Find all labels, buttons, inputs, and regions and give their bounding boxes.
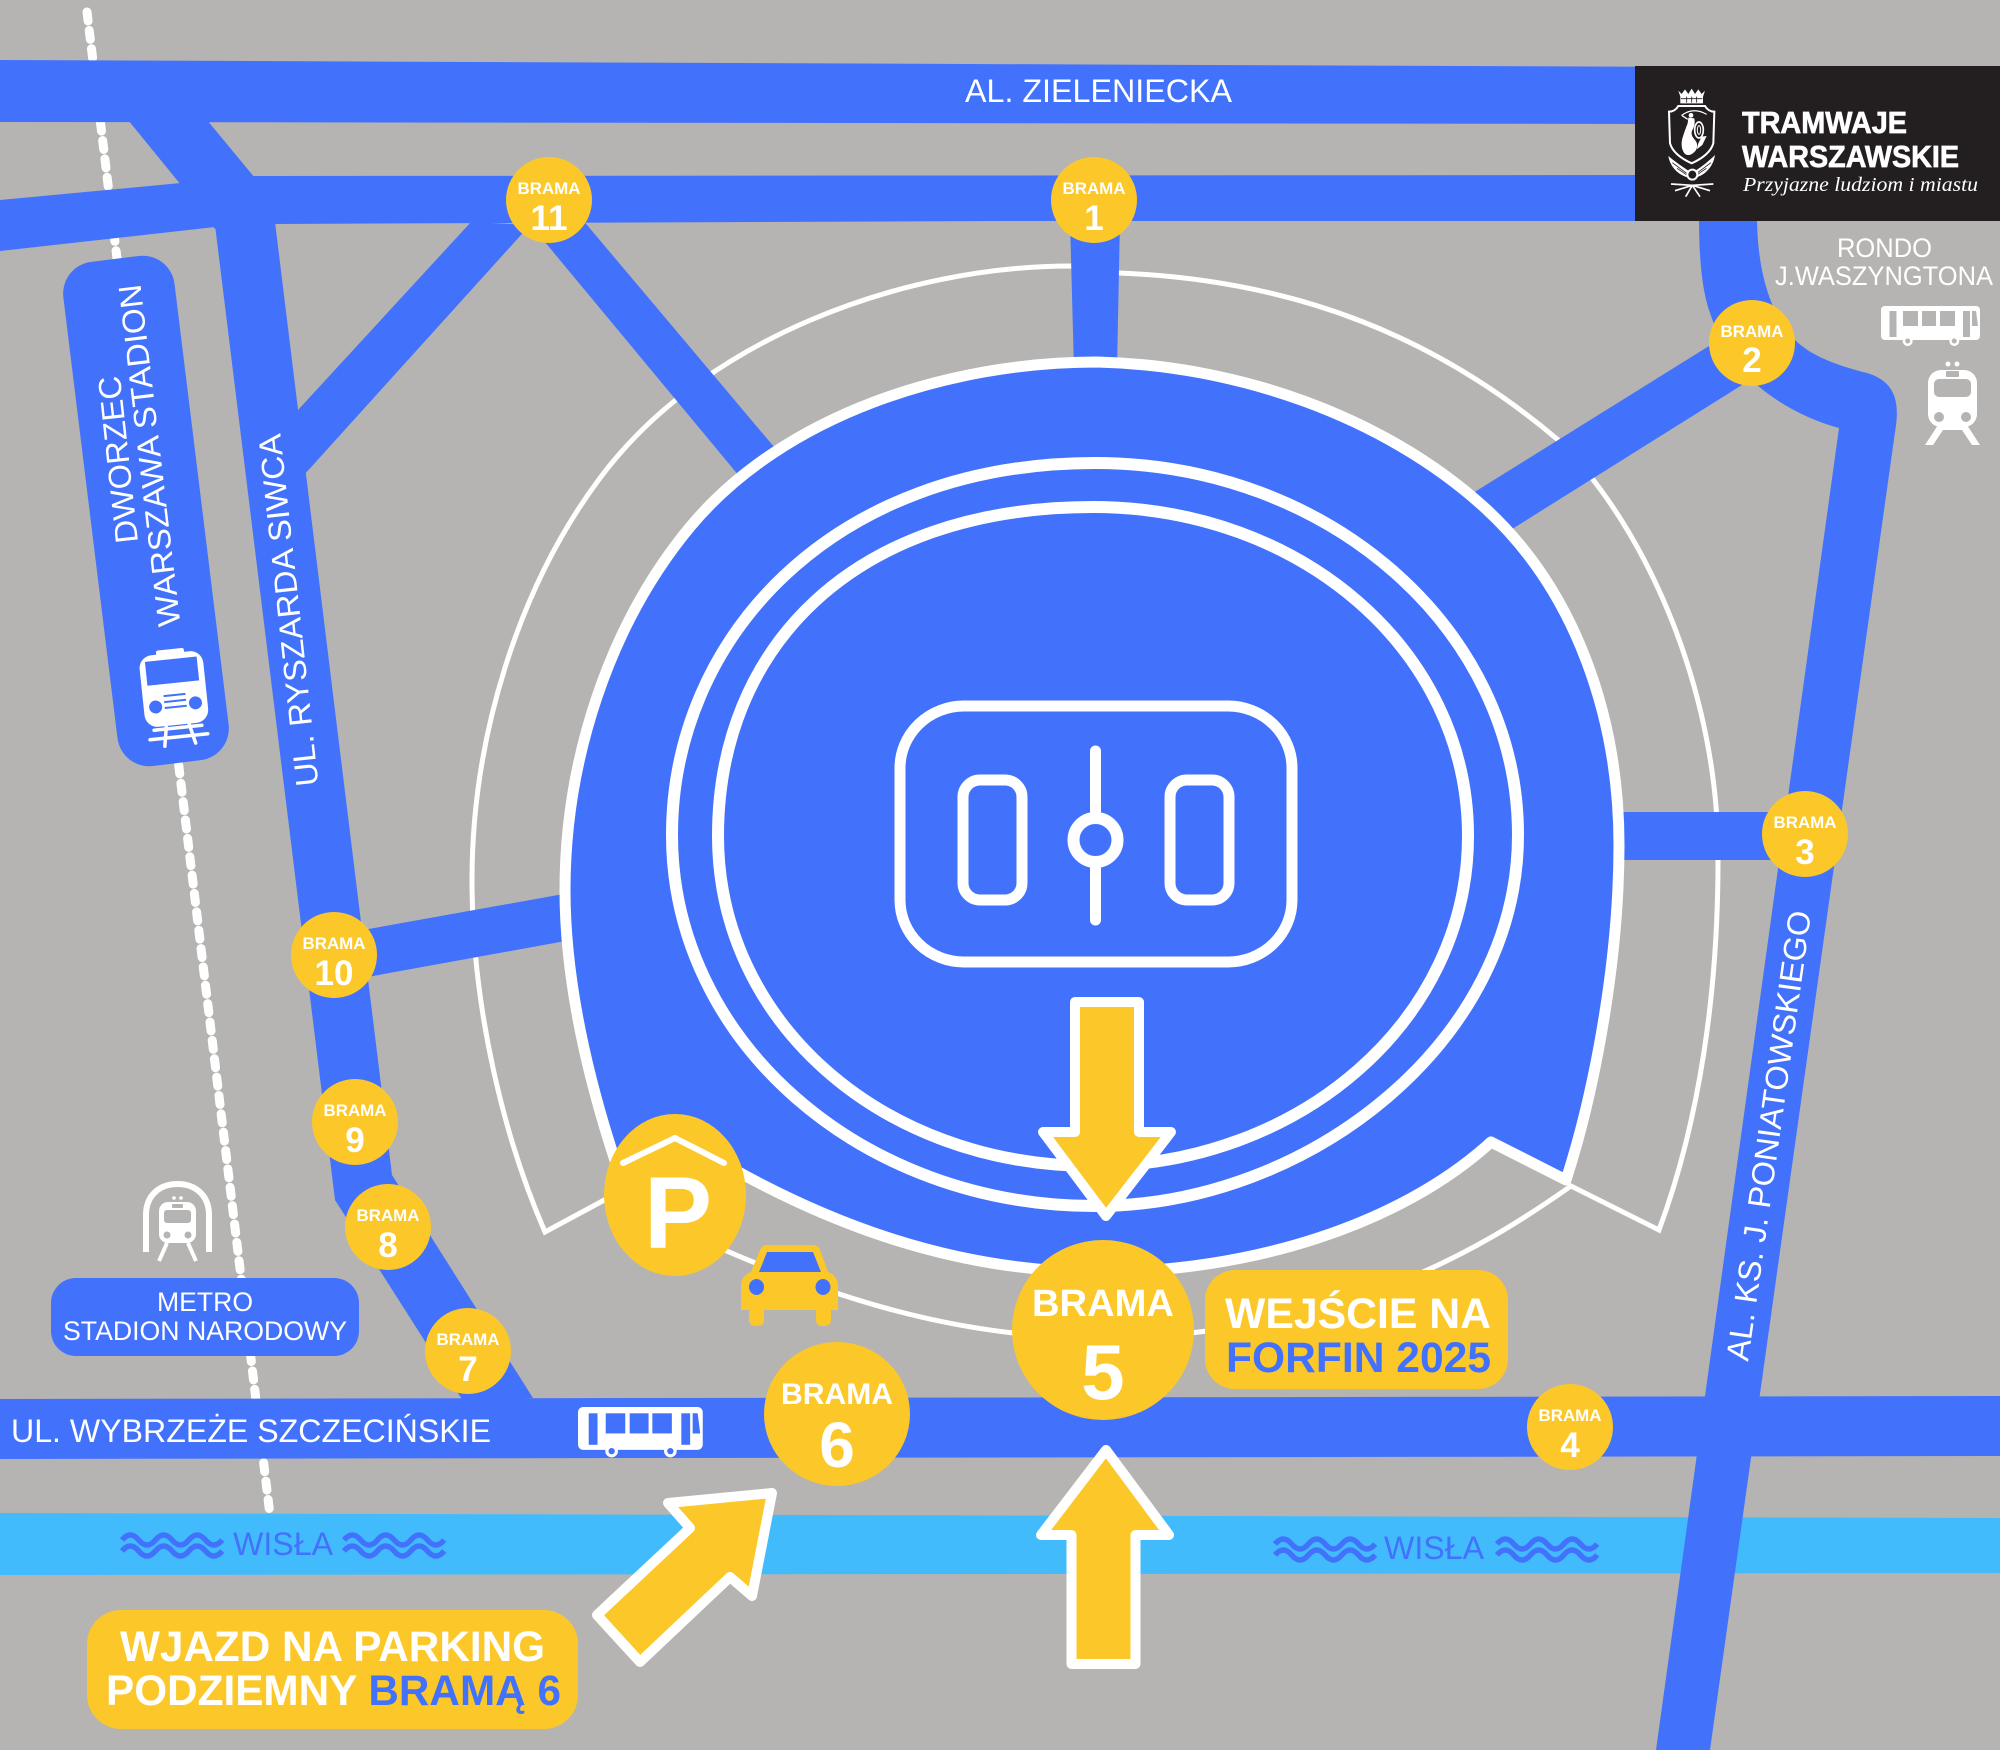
- gate 5: 5: [1081, 1328, 1125, 1416]
- road: link Siwca to gate 11: [298, 222, 530, 475]
- station name line 1: DWORZEC: [91, 374, 145, 545]
- gate 9: [312, 1079, 398, 1165]
- road: parallel street to gate 11 and 1: [0, 175, 1700, 251]
- callout: entrance to Forfin 2025: WEJŚCIE NA: [1225, 1289, 1491, 1338]
- gate 4: BRAMA: [1538, 1406, 1602, 1425]
- logo: Tramwaje Warszawskie: WARSZAWSKIE: [1742, 139, 1959, 174]
- gate 6: BRAMA: [781, 1378, 893, 1411]
- parking roof chevron: [623, 1138, 724, 1163]
- parking badge: [604, 1114, 746, 1276]
- gate 2: [1709, 300, 1795, 386]
- label: Rondo J. Waszyngtona: RONDO: [1837, 233, 1932, 263]
- callout: underground parking entrance: WJAZD NA PARKING: [120, 1623, 545, 1671]
- street label: Al. Zieleniecka: AL. ZIELENIECKA: [965, 73, 1233, 109]
- river label right: [1275, 1530, 1597, 1566]
- arrow: down to gate 5: [1043, 1002, 1171, 1216]
- logo wordmark: TRAMWAJE: [1742, 105, 1907, 140]
- stadium outer perimeter line: [472, 266, 1718, 1338]
- icon: waves right of label: [344, 1535, 444, 1556]
- icon: bus at Rondo: [1881, 306, 1980, 346]
- road: diagonal link: [128, 120, 255, 229]
- panel: metro Stadion Narodowy: STADION NARODOWY: [63, 1316, 347, 1346]
- callout: entrance to Forfin 2025: [1205, 1270, 1508, 1389]
- gate 3: BRAMA: [1774, 813, 1836, 832]
- crest shield: [1669, 106, 1714, 163]
- icon: waves left of label: [122, 1535, 222, 1556]
- road: gate 11 to stadium: [510, 200, 796, 500]
- gate 9: BRAMA: [324, 1101, 386, 1120]
- gate 3: 3: [1795, 833, 1815, 872]
- gate 1: 1: [1084, 199, 1104, 238]
- gate 8: 8: [378, 1226, 398, 1265]
- river label right: WISŁA: [1384, 1530, 1485, 1566]
- gate 7: 7: [458, 1350, 478, 1389]
- panel: metro Stadion Narodowy: METRO: [157, 1287, 253, 1317]
- road: gate 10 to stadium: [335, 892, 580, 982]
- gate 6: [764, 1342, 910, 1486]
- road: ul. Ryszarda Siwca: [215, 222, 533, 1401]
- road: gate 2 to stadium: [1473, 346, 1742, 531]
- callout: underground parking entrance: [87, 1610, 578, 1729]
- road: gate 1 to stadium: [1070, 220, 1120, 370]
- label: Rondo J. Waszyngtona: [1775, 233, 1993, 291]
- gate 2: 2: [1742, 341, 1762, 380]
- logo tagline: Przyjazne ludziom i miastu: [1742, 174, 1978, 196]
- river label left: [122, 1526, 444, 1562]
- gate 7: [425, 1308, 511, 1394]
- gate 4: 4: [1560, 1426, 1580, 1465]
- arrow: up to gate 5: [1041, 1450, 1169, 1664]
- gate 8: BRAMA: [356, 1206, 420, 1225]
- street label: ul. Wybrzeże Szczecińskie: UL. WYBRZEŻE SZCZECIŃSKIE: [11, 1413, 491, 1449]
- parking letter: P: [644, 1156, 712, 1270]
- station name line 2: WARSZAWA STADION: [112, 283, 187, 628]
- icon: bus on Wybrzeże: [578, 1407, 703, 1457]
- gate 10: BRAMA: [302, 934, 366, 953]
- crest wings and wheel: [1668, 156, 1688, 177]
- gate 11: BRAMA: [518, 179, 580, 198]
- gate 4: [1527, 1384, 1613, 1470]
- icon: waves left of label: [1275, 1539, 1375, 1560]
- road: gate 3 to stadium: [1600, 812, 1810, 860]
- gate 5: BRAMA: [1032, 1283, 1174, 1325]
- icon: tram at Rondo: [1925, 362, 1980, 445]
- icon: waves right of label: [1497, 1539, 1597, 1560]
- gate 6: 6: [819, 1409, 855, 1481]
- icon: car: [741, 1245, 838, 1326]
- road: Rondo and Al. Poniatowskiego: [1656, 215, 1897, 1750]
- label: Rondo J. Waszyngtona: J.WASZYNGTONA: [1775, 261, 1993, 291]
- logo crest: [1668, 89, 1715, 197]
- crest crown: [1678, 89, 1705, 103]
- stadium ring outer: [672, 463, 1518, 1206]
- river label left: WISŁA: [233, 1526, 334, 1562]
- crest mermaid: [1689, 113, 1693, 118]
- gate 2: BRAMA: [1720, 322, 1784, 341]
- gate 3: [1762, 791, 1848, 877]
- stadium outer shape: [565, 362, 1619, 1272]
- gate 5: [1012, 1240, 1194, 1420]
- gate 11: 11: [530, 199, 568, 238]
- panel: metro Stadion Narodowy: [51, 1278, 359, 1356]
- logo: Tramwaje Warszawskie: [1635, 66, 2000, 221]
- gate 11: [506, 157, 592, 243]
- callout: entrance to Forfin 2025: FORFIN 2025: [1226, 1335, 1491, 1382]
- stadium ring inner: [718, 507, 1468, 1166]
- gate 1: BRAMA: [1062, 179, 1126, 198]
- gate 7: BRAMA: [436, 1330, 500, 1349]
- gate 10: 10: [315, 954, 353, 993]
- gate 9: 9: [345, 1121, 365, 1160]
- street label: Al. Ks. J. Poniatowskiego: AL. KS. J. PONIATOWSKIEGO: [1719, 908, 1818, 1363]
- callout: underground parking entrance: PODZIEMNY BRAMĄ 6: [106, 1667, 561, 1715]
- crest lightning bolts: [1671, 184, 1713, 197]
- panel: railway station Warszawa Stadion: [59, 252, 233, 770]
- stadium bowl: [565, 362, 1619, 1272]
- gate 10: [291, 912, 377, 998]
- road: Al. Zieleniecka: [0, 60, 1700, 124]
- arrow: diagonal to gate 6: [597, 1493, 772, 1662]
- road: Wybrzeże Szczecińskie: [0, 1396, 2000, 1459]
- street label: ul. Ryszarda Siwca: UL. RYSZARDA SIWCA: [251, 432, 325, 788]
- icon: train on rails: [138, 646, 212, 748]
- icon: metro tunnel with train: [146, 1184, 209, 1261]
- gate 8: [345, 1184, 431, 1270]
- river: Wisła: [0, 1513, 2000, 1575]
- football pitch: [900, 706, 1292, 962]
- railway line: [87, 12, 270, 1515]
- gate 1: [1051, 157, 1137, 243]
